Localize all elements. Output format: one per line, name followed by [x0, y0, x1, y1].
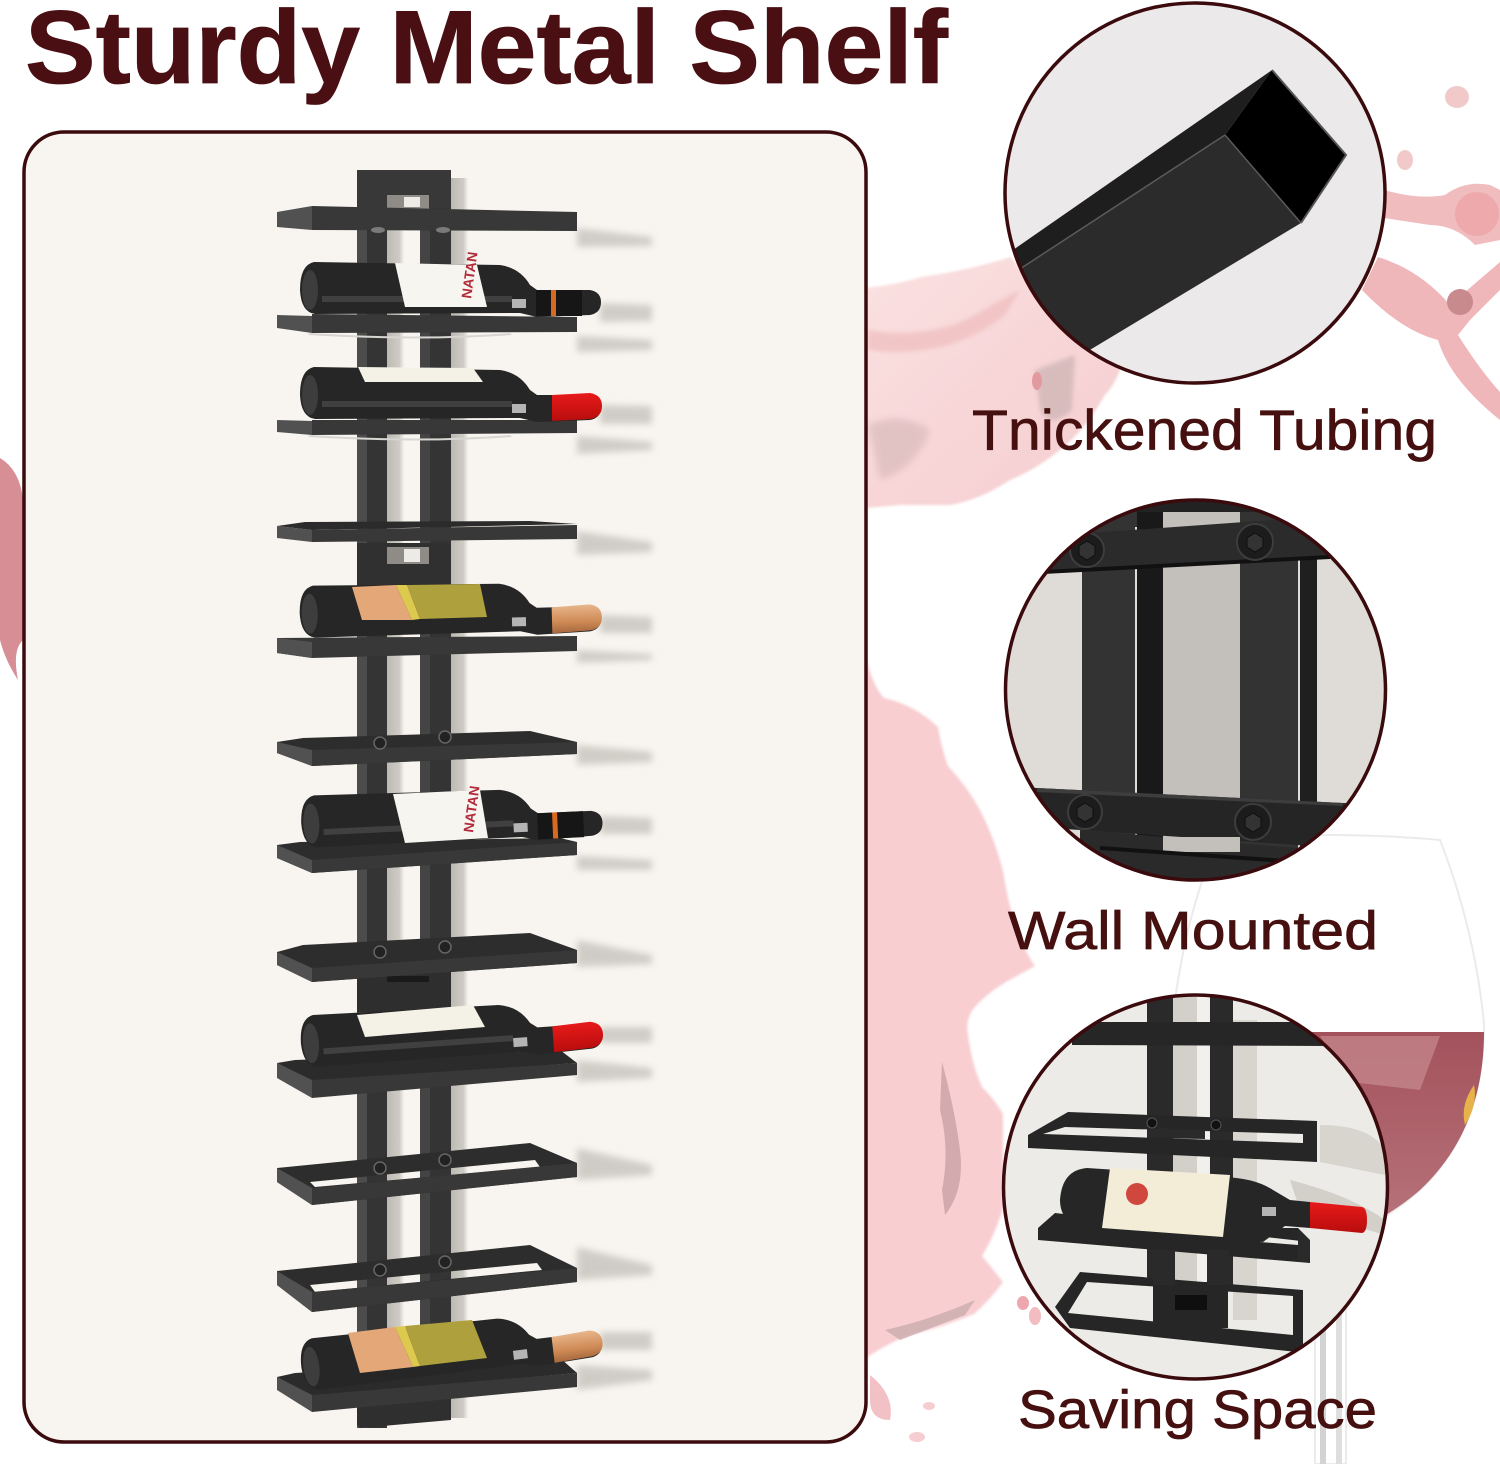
shelf 4	[277, 521, 577, 542]
shelf 11	[277, 1245, 577, 1312]
bottle 5: red cap	[299, 995, 604, 1071]
bottle 4: white label, black cap: NATAN	[460, 785, 483, 833]
label: thickened tubing: Tnickened Tubing	[972, 398, 1437, 462]
bottle 4: white label, black cap	[300, 782, 603, 851]
wall shadows	[577, 228, 652, 1390]
label: saving space: Saving Space	[1018, 1380, 1377, 1440]
bottle 1: white label, black cap	[300, 251, 601, 317]
shelf 9 back	[277, 1050, 577, 1082]
shelf 7	[277, 838, 577, 873]
panel frame	[24, 132, 866, 1442]
shelf 8	[277, 933, 577, 982]
wine splash: centre	[866, 257, 1122, 508]
label: wall mounted: Wall Mounted	[1008, 901, 1378, 961]
shelf 3	[277, 420, 577, 440]
shelf 6	[277, 731, 577, 766]
shelf 10	[277, 1143, 577, 1205]
bottle 6: gold label, copper cap	[298, 1303, 604, 1395]
wine splash: left edge	[0, 458, 23, 680]
circle: thickened tubing detail	[1000, 3, 1385, 404]
shelf 12 front	[277, 1373, 577, 1412]
bottle 1: white label, black cap: NATAN	[458, 251, 481, 299]
wine glass background	[1174, 835, 1484, 1464]
shelf 9 front	[277, 1063, 577, 1098]
shelf 1	[277, 206, 577, 233]
shelf 12 back	[277, 1358, 577, 1397]
wine splash: lower	[866, 656, 1041, 1442]
bottle 2: red cap	[300, 367, 602, 422]
panel: product photo	[24, 132, 866, 1442]
circle: saving space detail	[1004, 995, 1388, 1379]
circle: wall mounted detail	[1000, 495, 1400, 890]
shelf 5	[277, 636, 577, 658]
wine rack: uprights	[357, 170, 468, 1428]
shelf 2	[277, 314, 577, 338]
bottle 3: gold label, copper cap	[299, 578, 602, 641]
wine splash: upper right	[1362, 86, 1500, 420]
